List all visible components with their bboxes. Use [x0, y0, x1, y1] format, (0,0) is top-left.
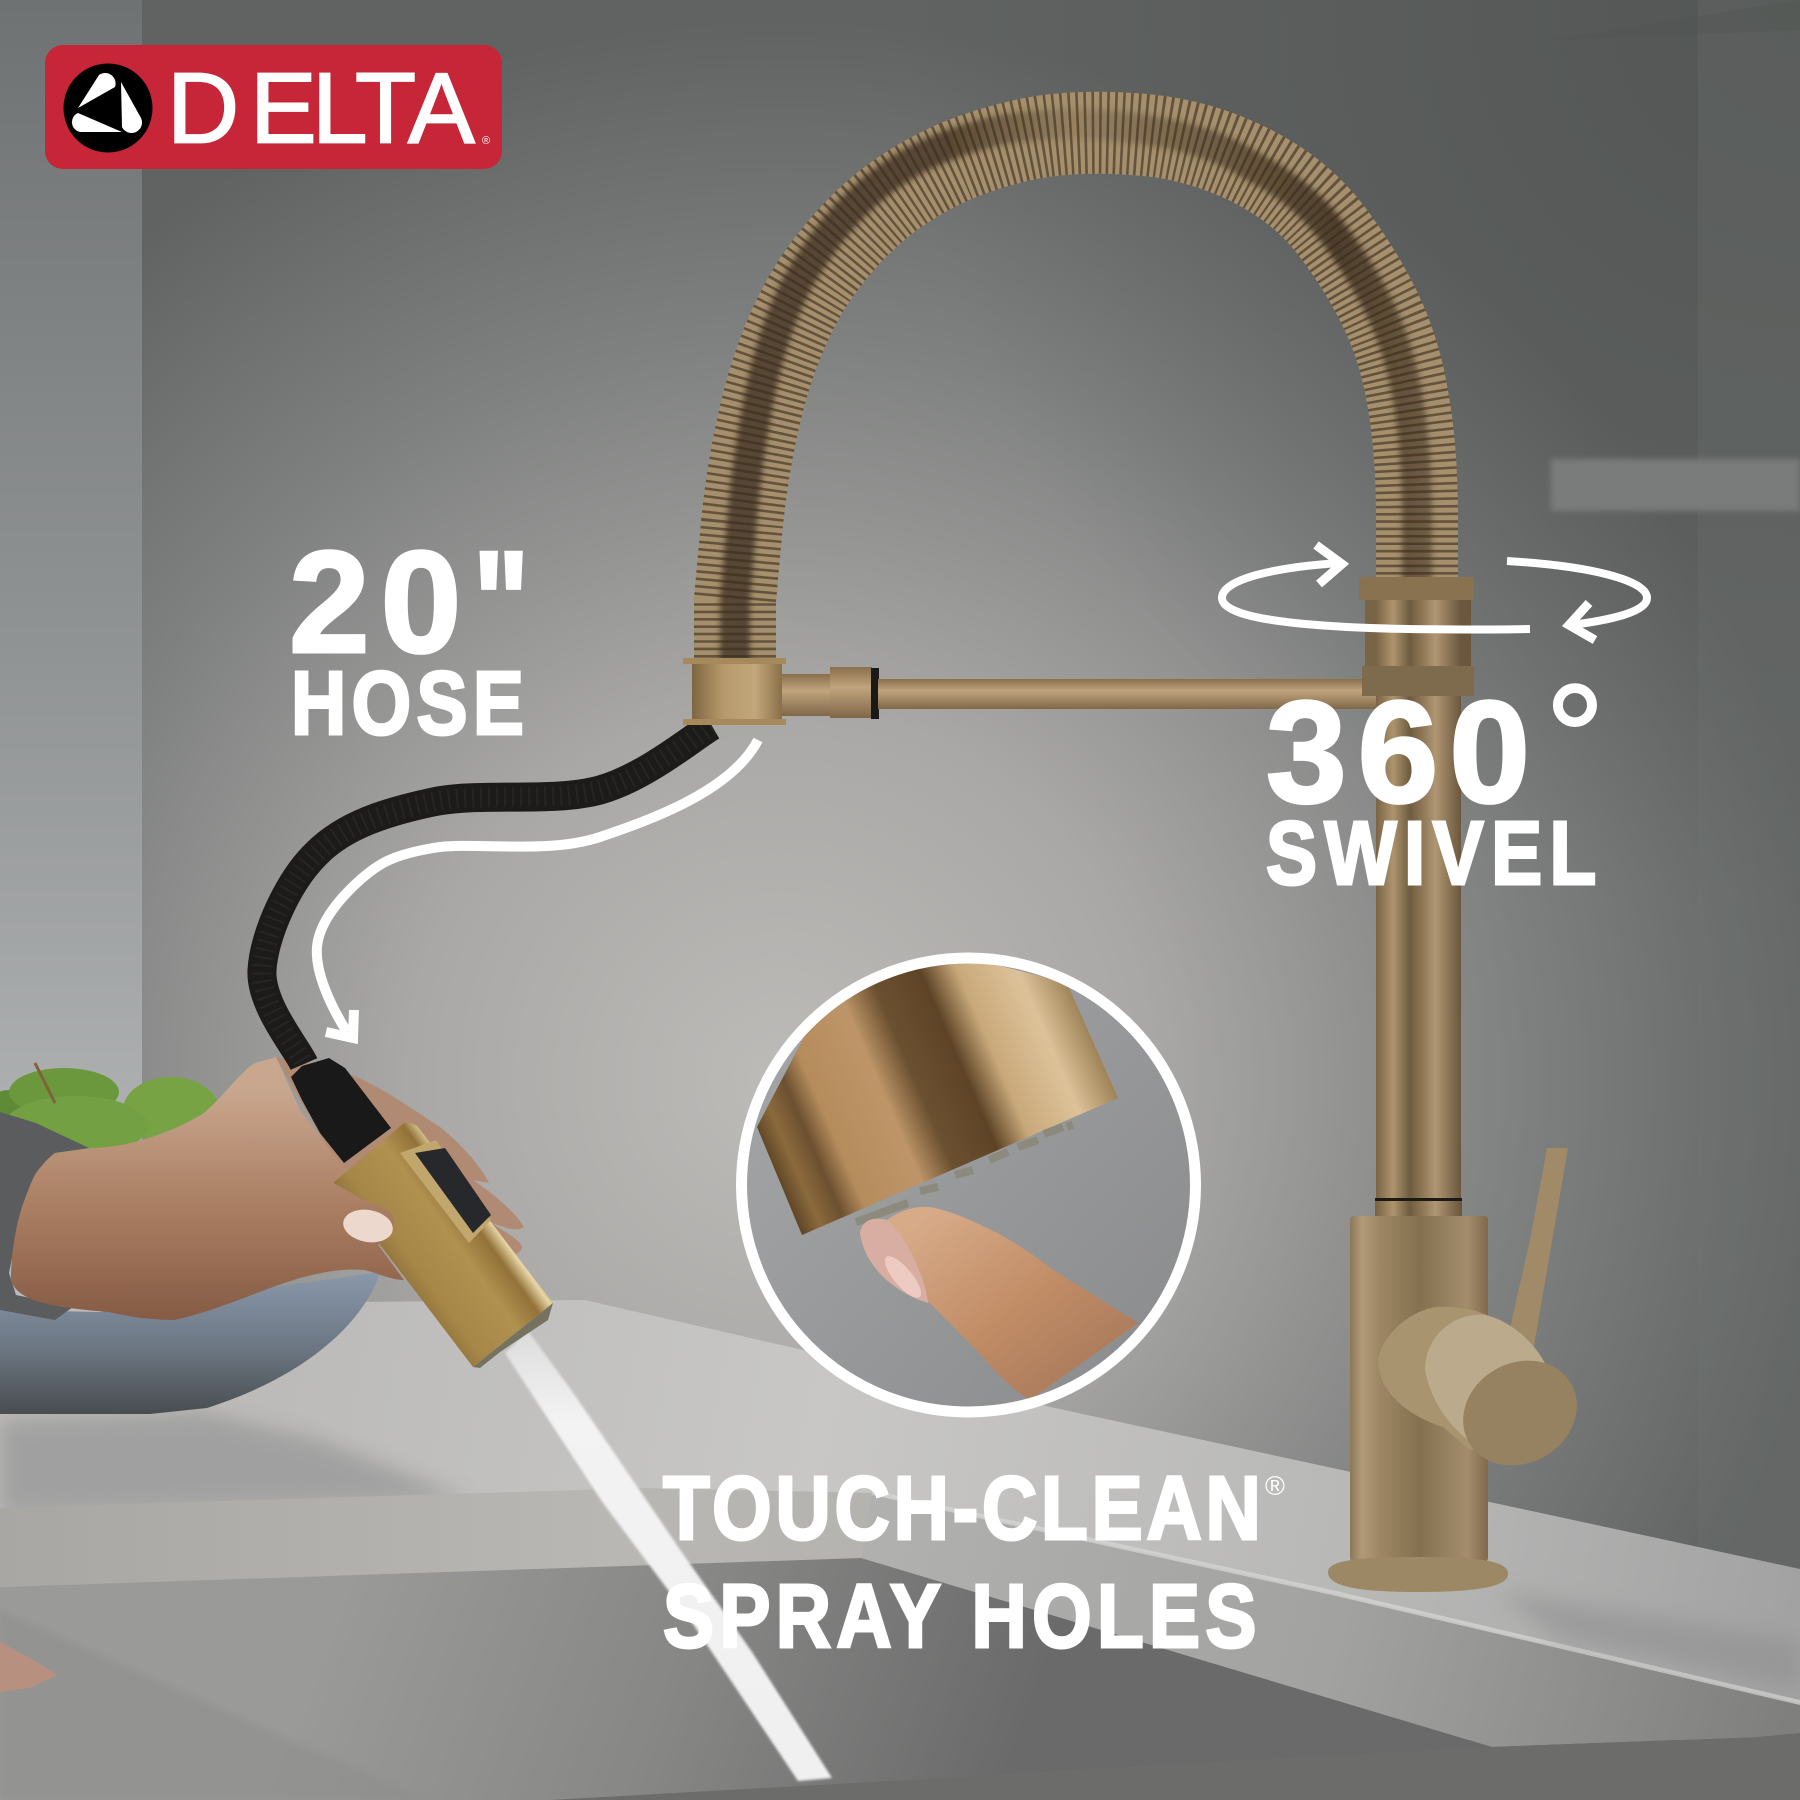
wordmark: DELTA: [167, 52, 475, 164]
base flange: [1328, 1557, 1508, 1592]
icon: Delta triangle mark: [64, 64, 152, 152]
elbow connector: [683, 658, 879, 725]
spray head: [291, 1058, 553, 1368]
black connector: [291, 1058, 391, 1163]
base body: [1350, 1216, 1488, 1562]
fingernail: [860, 1219, 928, 1303]
label: 20 inch hose: 20: [289, 521, 472, 683]
inset circle: touch-clean spray holes: [740, 930, 1196, 1413]
horizontal arm: [878, 679, 1378, 709]
swivel arrows: [1222, 545, 1647, 640]
sleeve: [0, 1112, 89, 1320]
water stream: [505, 1331, 832, 1781]
black button: [415, 1148, 491, 1233]
palm: [11, 1057, 404, 1320]
spray nozzles: [856, 1125, 1073, 1222]
brass body: [333, 1123, 553, 1367]
kitchen counter and sink: [0, 1300, 1800, 1800]
label: touch-clean spray holes: SPRAY HOLES: [663, 1565, 1262, 1666]
label: 360 swivel: SWIVEL: [1266, 802, 1604, 903]
button housing: [400, 1140, 491, 1243]
bowl: [0, 1272, 380, 1414]
white ring: [742, 958, 1196, 1412]
thumb over spray head: [250, 1174, 395, 1250]
label: 20 inch hose: HOSE: [291, 652, 529, 753]
label: touch-clean spray holes: [663, 1457, 1285, 1666]
label: 360 swivel: 360: [1266, 671, 1541, 833]
Delta logo badge: [45, 45, 502, 169]
neck ring: [1375, 1198, 1462, 1218]
thumbnail: [341, 1206, 395, 1246]
column: [1376, 640, 1461, 1200]
apples: [0, 1063, 219, 1156]
label: touch-clean spray holes: TOUCH-CLEAN: [663, 1457, 1265, 1558]
hand holding spray head: [0, 1057, 524, 1320]
black braided hose: [262, 726, 712, 1064]
label: 360 swivel: [1266, 653, 1605, 903]
handle hub: [1378, 1307, 1596, 1486]
label: 360 swivel: °: [1545, 653, 1605, 821]
bowl of green apples: [0, 1063, 380, 1414]
label: 20 inch hose: [289, 521, 529, 753]
faucet: [683, 124, 1596, 1592]
label: touch-clean spray holes: ®: [1265, 1471, 1285, 1501]
brass spray face: [757, 964, 1118, 1235]
fingertip: [860, 1207, 1138, 1400]
lever handle: [1505, 1148, 1568, 1352]
rear fingers: [276, 1057, 524, 1254]
label: 20 inch hose: ": [473, 522, 529, 684]
coiled spring spout: [735, 124, 1417, 665]
top collar: [1359, 577, 1474, 696]
fingertips at lower left: [0, 1642, 58, 1692]
Delta logo badge: ®: [482, 135, 490, 147]
white arrow: hose path: [317, 740, 758, 1038]
